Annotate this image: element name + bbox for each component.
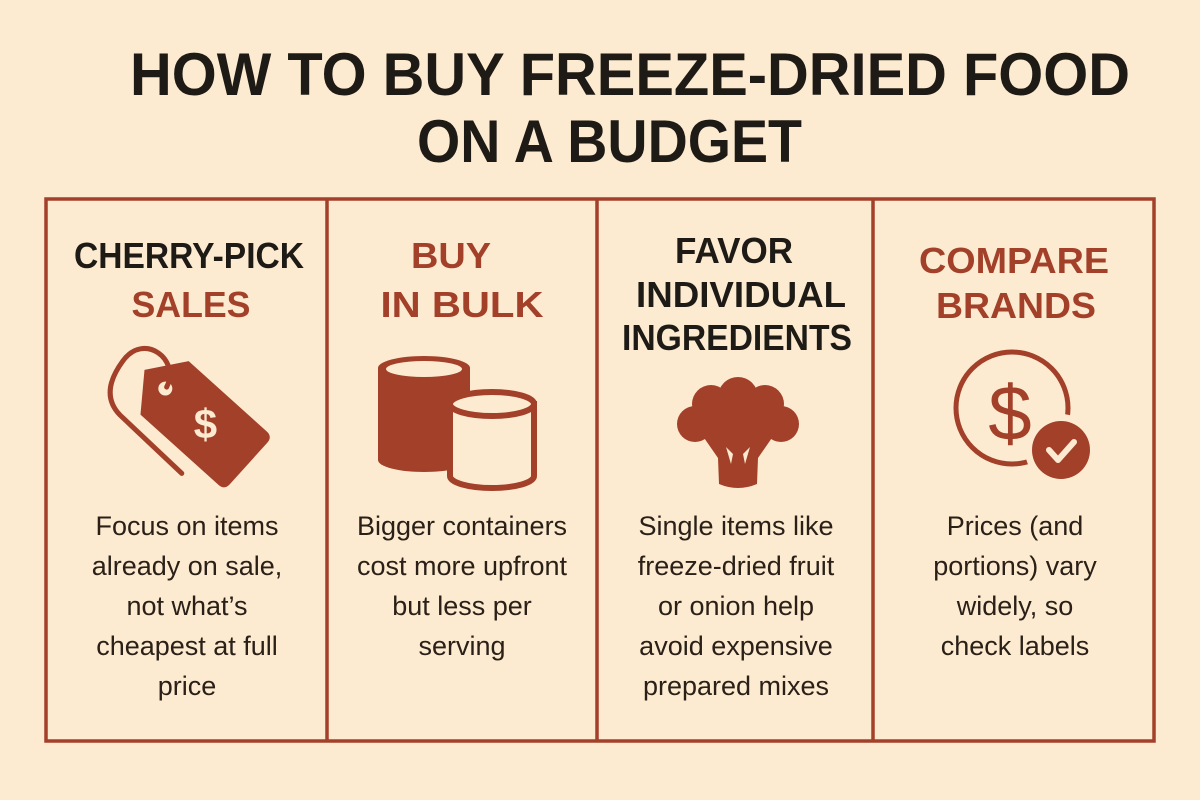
heading: compare brands: [919, 240, 1109, 326]
text: individual: prepared mixes: [643, 671, 829, 701]
title: ON A BUDGET: [417, 108, 802, 175]
heading: buy in bulk: [380, 235, 544, 325]
panel: favor individual ingredients: [622, 230, 852, 701]
heading: favor individual ingredients: INGREDIENTS: [622, 317, 852, 358]
text: cherry-pick: price: [158, 671, 216, 701]
text: individual: freeze-dried fruit: [638, 551, 835, 581]
text: cherry-pick: not what’s: [126, 591, 248, 621]
heading: favor individual ingredients: INDIVIDUAL: [636, 274, 846, 315]
text: buy in bulk: [357, 511, 568, 661]
icon: containers: [378, 356, 534, 488]
text: cherry-pick: cheapest at full: [96, 631, 278, 661]
heading: favor individual ingredients: [622, 230, 852, 358]
text: cherry-pick: [92, 511, 282, 701]
text: buy in bulk: but less per: [392, 591, 532, 621]
text: buy in bulk: Bigger containers: [357, 511, 567, 541]
title: HOW TO BUY FREEZE-DRIED FOOD: [130, 41, 1130, 108]
text: individual: Single items like: [638, 511, 834, 541]
text: cherry-pick: already on sale,: [92, 551, 282, 581]
text: individual: or onion help: [658, 591, 814, 621]
icon: broccoli: [677, 377, 799, 488]
heading: compare brands: BRANDS: [936, 285, 1096, 326]
text: compare: portions) vary: [933, 551, 1097, 581]
heading: cherry-pick sales: CHERRY-PICK: [74, 235, 304, 276]
icon: coin with check: [956, 352, 1097, 486]
panel frame: [46, 199, 1154, 741]
panel: compare brands: [919, 240, 1109, 661]
heading: favor individual ingredients: FAVOR: [675, 230, 793, 271]
heading: cherry-pick sales: SALES: [132, 284, 250, 325]
icon: coin with check: $: [988, 369, 1032, 457]
title: [130, 41, 1130, 175]
text: cherry-pick: Focus on items: [95, 511, 279, 541]
panel: buy in bulk: [357, 235, 568, 661]
icon: price tag: $: [194, 401, 217, 448]
heading: cherry-pick sales: [74, 235, 304, 325]
heading: buy in bulk: IN BULK: [380, 284, 544, 325]
text: buy in bulk: serving: [418, 631, 506, 661]
text: compare: check labels: [941, 631, 1089, 661]
text: individual: [638, 511, 835, 701]
text: buy in bulk: cost more upfront: [357, 551, 568, 581]
heading: buy in bulk: BUY: [411, 235, 491, 276]
text: compare: [933, 511, 1097, 661]
text: compare: widely, so: [956, 591, 1073, 621]
text: compare: Prices (and: [947, 511, 1083, 541]
icon: price tag: [93, 328, 273, 502]
panel: cherry-pick sales: [74, 235, 304, 701]
heading: compare brands: COMPARE: [919, 240, 1109, 281]
text: individual: avoid expensive: [639, 631, 833, 661]
